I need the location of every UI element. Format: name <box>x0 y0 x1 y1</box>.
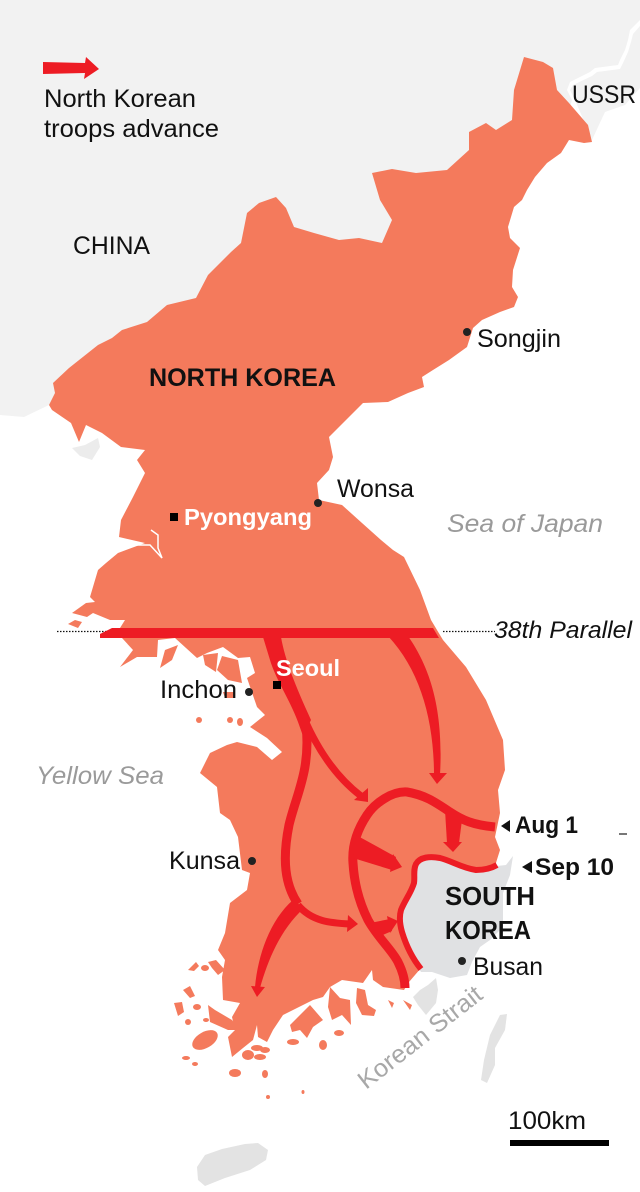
panel: unoccupied South Korea (Busan perimeter) <box>400 856 513 978</box>
label: China: CHINA <box>73 232 150 260</box>
Aug 1 line branch arrow down <box>443 810 462 852</box>
legend: arrow <box>43 57 99 79</box>
legend: text: North Korean <box>44 85 196 113</box>
panel: troop advance arrows <box>100 628 497 997</box>
Tsushima island <box>481 1014 507 1083</box>
capital: Seoul: Seoul <box>276 655 340 681</box>
Jeju island <box>197 1143 268 1186</box>
Geoje island <box>413 978 438 1015</box>
city: Wonsa <box>314 475 414 507</box>
panel: grey southern islands <box>197 978 507 1186</box>
scale bar: 100km <box>508 1107 586 1135</box>
date label: Aug 1: Aug 1 <box>515 812 578 839</box>
USSR land mass <box>570 26 640 140</box>
west coast and southern islands <box>68 620 412 1038</box>
Sep 10 front line <box>400 857 497 969</box>
Aug 1 line branch arrow lower <box>370 916 398 937</box>
panel: neighbouring land <box>0 0 640 460</box>
scale bar <box>508 1107 609 1146</box>
grey islands near west coast <box>72 438 100 460</box>
China land mass <box>0 0 640 417</box>
date label: Sep 10: Sep 10 <box>535 854 614 881</box>
parallel dotted lines <box>57 630 495 632</box>
branch arrow to south-east <box>304 718 368 802</box>
capital: Pyongyang: Pyongyang <box>184 504 312 530</box>
label: USSR: USSR <box>572 81 636 109</box>
city: Inchon: Inchon <box>160 676 237 704</box>
legend: text: troops advance <box>44 115 219 143</box>
panel: Korea occupied territory <box>49 57 592 1099</box>
label: Sea of Japan: Sea of Japan <box>447 510 603 538</box>
Aug 1 line branch arrow mid <box>353 835 402 872</box>
central western arrow stem <box>285 725 307 904</box>
city: Wonsa: Wonsa <box>337 475 414 503</box>
trunk arrow from Seoul south <box>263 637 311 736</box>
label: Korean Strait: Korean Strait <box>352 980 488 1095</box>
label: North Korea: NORTH KOREA <box>149 364 336 392</box>
city: Busan: Busan <box>473 953 543 981</box>
main peninsula <box>49 57 592 1057</box>
inlet on west coast <box>130 530 162 558</box>
south-western arrow <box>251 900 304 997</box>
Aug 1 front line <box>353 792 495 988</box>
eastern coast arrow <box>388 636 447 784</box>
tiny map mark <box>619 833 627 835</box>
38th parallel front line <box>100 628 439 638</box>
label: South Korea: SOUTH <box>445 881 535 911</box>
central south arrow <box>298 905 358 932</box>
label: Yellow Sea: Yellow Sea <box>36 762 164 790</box>
label: 38th Parallel: 38th Parallel <box>494 617 633 644</box>
label: South Korea: KOREA <box>445 915 531 945</box>
city: Songjin: Songjin <box>477 325 561 353</box>
city: Kunsa: Kunsa <box>169 847 240 875</box>
